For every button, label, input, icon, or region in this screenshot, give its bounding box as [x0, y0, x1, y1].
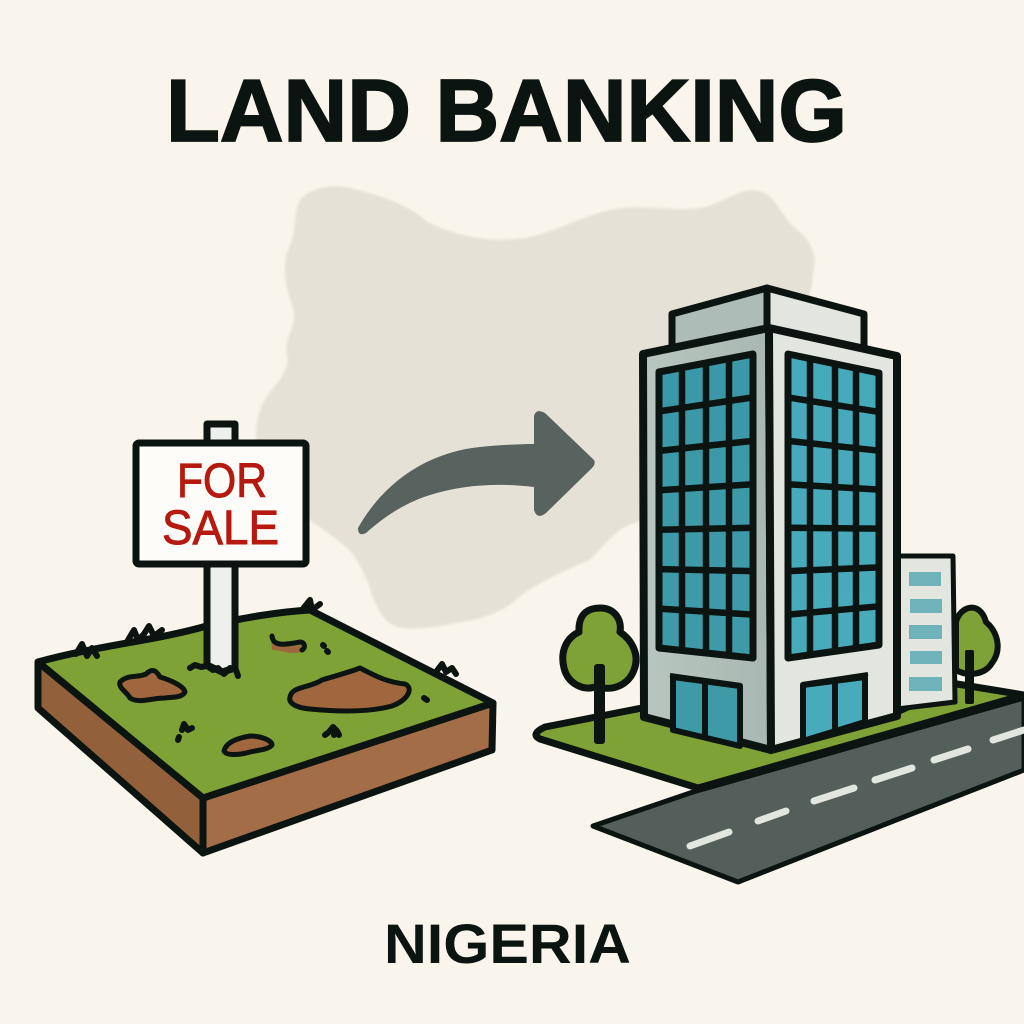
road: [593, 698, 1024, 882]
tree: right: [956, 608, 998, 704]
bare patch: left: [120, 670, 185, 701]
post base tuft: [190, 665, 238, 676]
dark grass specks: [178, 645, 427, 740]
signpost: [207, 424, 235, 672]
plot: left soil face: [38, 662, 203, 853]
bare patch: small back: [271, 638, 305, 653]
sign text: SALE: SALE: [162, 502, 279, 555]
small background building: [897, 556, 955, 709]
road markings: [690, 730, 1024, 846]
left entrance doors: [670, 675, 741, 746]
sign board: [136, 443, 306, 564]
plot: grass top: [38, 610, 493, 798]
left window grid: [659, 354, 753, 658]
developed site with tower: [536, 288, 1024, 882]
title: LAND BANKING: [166, 61, 847, 160]
sign text: FOR: FOR: [177, 455, 267, 508]
right window grid: [788, 354, 879, 658]
lawn: [536, 684, 1024, 788]
bare patch: large right: [290, 668, 409, 711]
tower right face: [769, 328, 897, 750]
tower rooftop block: [672, 288, 864, 350]
grass tufts: [76, 600, 456, 674]
bare patch: small front: [224, 736, 272, 754]
map silhouette: Nigeria: [256, 186, 815, 628]
plot: front soil face: [203, 703, 493, 853]
land plot with for sale sign: [38, 424, 493, 853]
small building windows: [909, 572, 942, 691]
arrow: from land to development: [358, 411, 595, 534]
tower left face: [643, 328, 771, 750]
tree: left: [563, 608, 636, 744]
subtitle: NIGERIA: [384, 912, 631, 975]
right entrance doors: [802, 674, 868, 741]
